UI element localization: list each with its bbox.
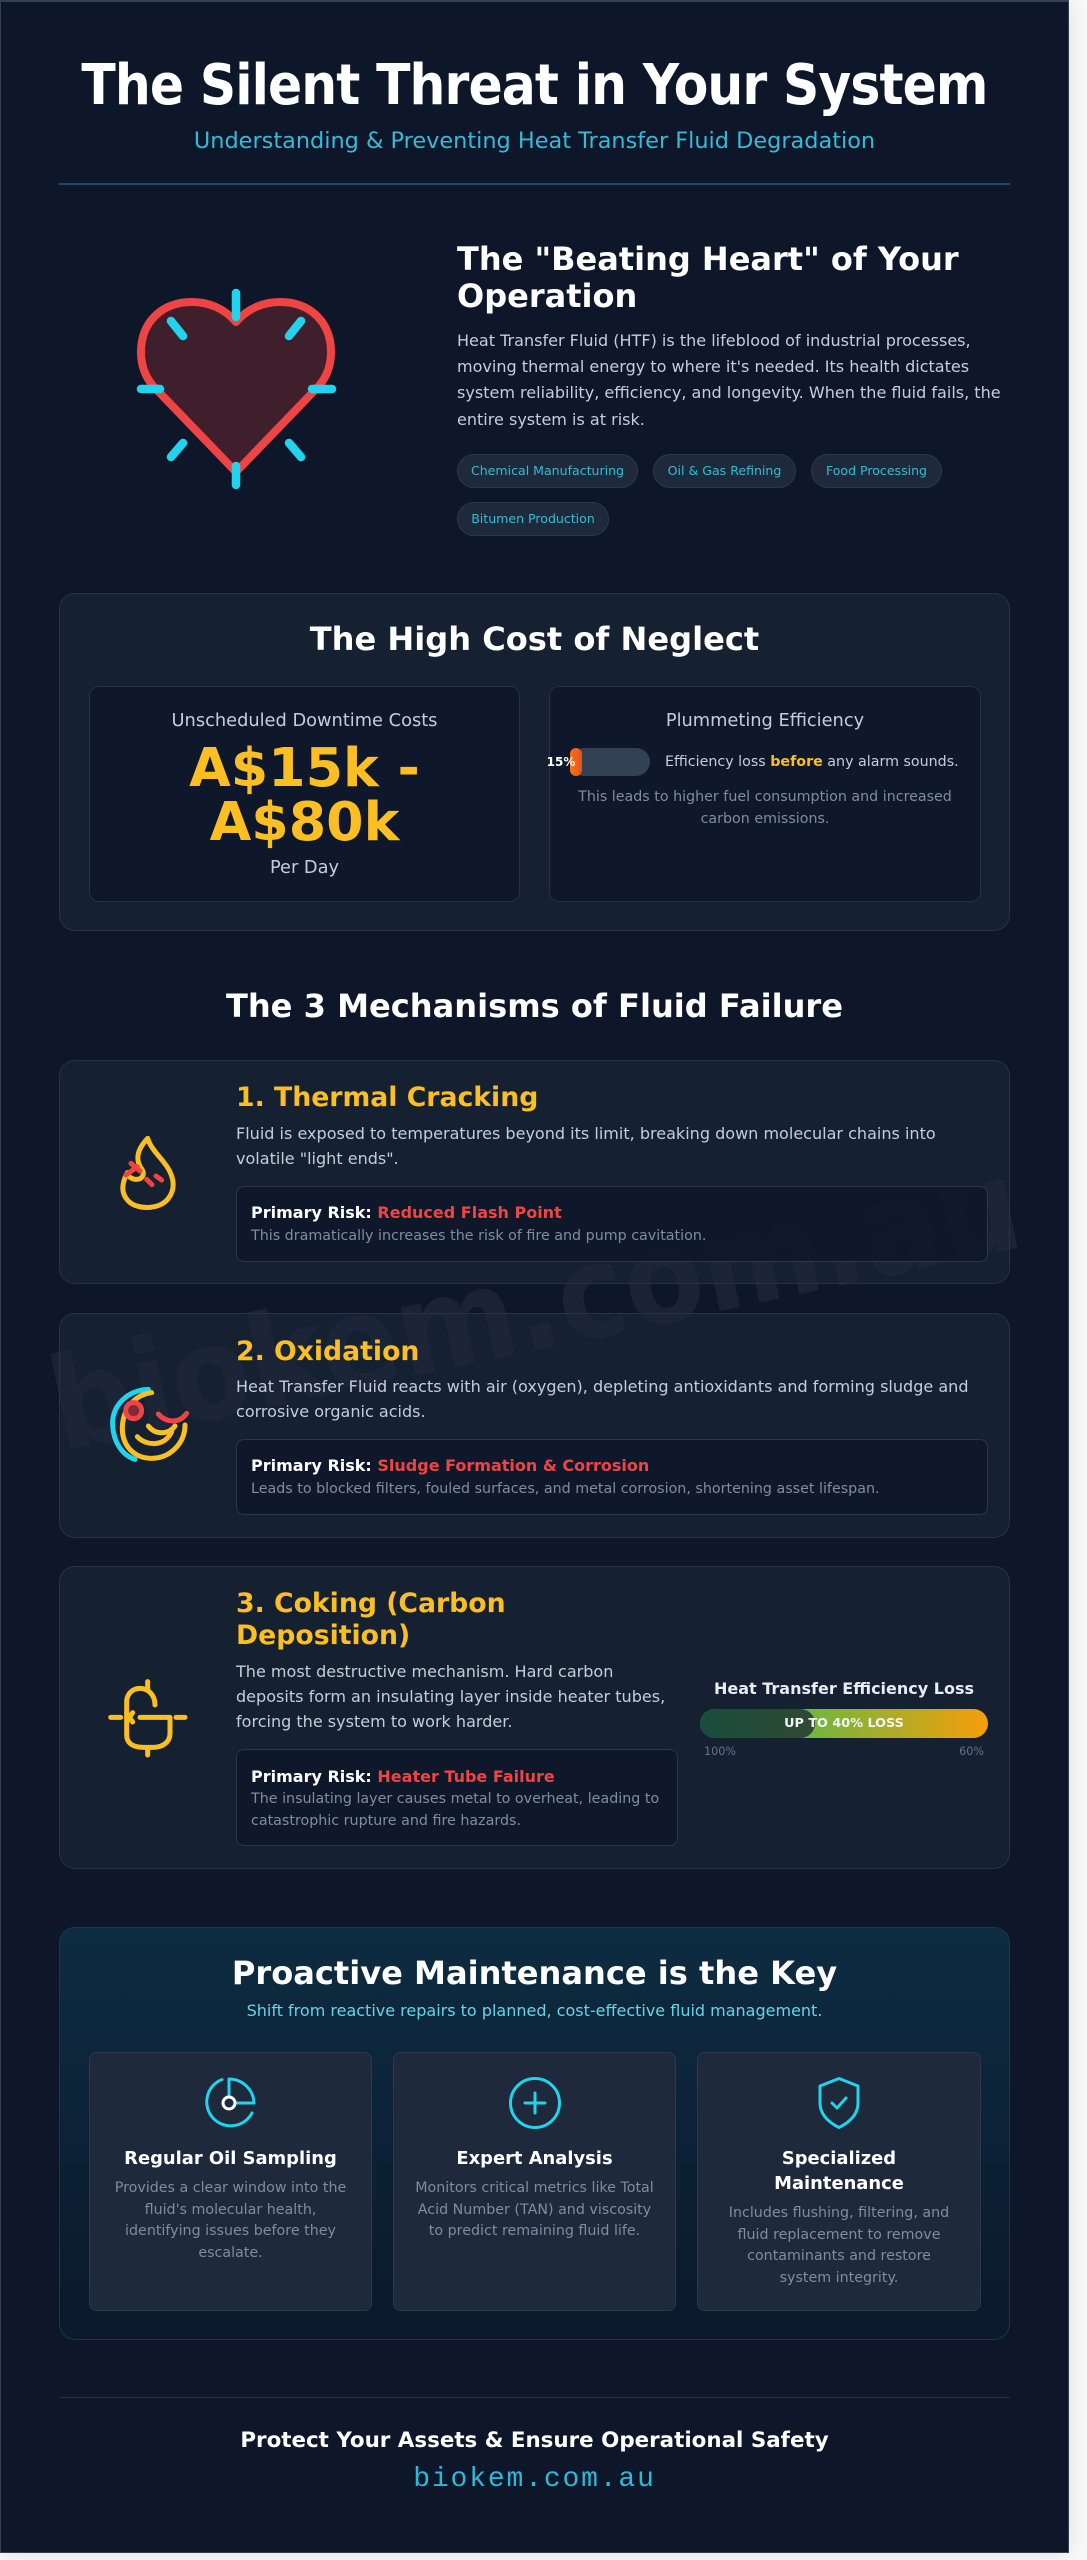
heading: 3. Coking (Carbon [236, 1588, 506, 1619]
efficiency note: Efficiency loss before any alarm sounds. [665, 754, 959, 770]
card text: Monitors critical metrics like Total [415, 2180, 654, 2196]
gradient bar [700, 1709, 988, 1738]
card text [415, 2180, 654, 2239]
panel: cost of neglect [59, 593, 1010, 931]
bar track [570, 748, 650, 776]
intro paragraph: system reliability, efficiency, and longevity. When the fluid fails, the [457, 383, 1001, 402]
intro heading: Operation [457, 277, 637, 315]
label: Plummeting Efficiency [666, 710, 864, 731]
footer website: biokem.com.au [413, 2464, 656, 2495]
consequence: This leads to higher fuel consumption and increased [578, 789, 952, 805]
icon: shield check [818, 2077, 860, 2129]
description: volatile "light ends". [236, 1149, 399, 1168]
section heading: The 3 Mechanisms of Fluid Failure [226, 987, 843, 1025]
consequence: carbon emissions. [701, 811, 829, 827]
per day: Per Day [270, 857, 339, 878]
card text: Includes flushing, filtering, and [729, 2205, 949, 2221]
heading: Deposition) [236, 1620, 410, 1651]
risk title: Primary Risk: Heater Tube Failure [251, 1767, 555, 1786]
tag: Chemical Manufacturing [471, 463, 624, 478]
tag: Food Processing [826, 463, 927, 478]
card title: Maintenance [774, 2173, 904, 2194]
card text: Provides a clear window into the [115, 2180, 346, 2196]
risk detail: catastrophic rupture and fire hazards. [251, 1813, 521, 1829]
footer divider [59, 2397, 1010, 2398]
subtitle: Understanding & Preventing Heat Transfer Fluid Degradation [194, 128, 875, 154]
cost figure: A$80k [210, 790, 399, 853]
card title: Regular Oil Sampling [124, 2148, 337, 2169]
primary risk [236, 1749, 678, 1846]
primary risk [236, 1439, 988, 1515]
cost figure [189, 736, 420, 853]
card: efficiency [549, 686, 981, 902]
description: deposits form an insulating layer inside heater tubes, [236, 1687, 665, 1706]
card title: Specialized [782, 2148, 896, 2169]
card text: contaminants and restore [747, 2248, 931, 2264]
lost portion [700, 1709, 815, 1738]
tag [811, 454, 942, 488]
risk detail: This dramatically increases the risk of fire and pump cavitation. [251, 1228, 706, 1244]
bar label: UP TO 40% LOSS [784, 1716, 904, 1731]
card text: to predict remaining fluid life. [429, 2223, 640, 2239]
bar fill [570, 748, 582, 776]
risk detail: Leads to blocked filters, fouled surfaces, and metal corrosion, shortening asset lifespan. [251, 1481, 880, 1497]
tag [653, 454, 796, 488]
bar: 15 percent efficiency loss [547, 748, 650, 776]
card text: system integrity. [780, 2270, 898, 2286]
intro paragraph: Heat Transfer Fluid (HTF) is the lifeblood of industrial processes, [457, 331, 971, 350]
description: Heat Transfer Fluid reacts with air (oxygen), depleting antioxidants and forming sludge and [236, 1377, 969, 1396]
cost figure: A$15k - [189, 736, 420, 799]
icon: beating heart [136, 288, 336, 490]
card: downtime costs [89, 686, 520, 902]
intro paragraph [457, 331, 1001, 429]
panel: coking [59, 1566, 1010, 1869]
card text: Acid Number (TAN) and viscosity [418, 2202, 651, 2218]
chart title: Heat Transfer Efficiency Loss [714, 1679, 974, 1698]
icon: oxidation [110, 1386, 190, 1462]
heading: 2. Oxidation [236, 1336, 419, 1367]
heading: The High Cost of Neglect [310, 620, 759, 658]
icon: flame [120, 1136, 176, 1210]
icon: plus in circle [509, 2077, 561, 2129]
card text [729, 2205, 949, 2286]
icon: pie gauge [205, 2078, 256, 2128]
card text: escalate. [198, 2244, 263, 2260]
description: The most destructive mechanism. Hard carbon [236, 1662, 613, 1681]
card text [115, 2180, 346, 2260]
consequence [578, 789, 952, 827]
panel: thermal cracking [59, 1060, 1010, 1284]
icon: coked pipe [108, 1679, 188, 1758]
description [236, 1124, 936, 1168]
card title [774, 2148, 904, 2194]
panel: proactive maintenance [59, 1927, 1010, 2340]
heading: Proactive Maintenance is the Key [232, 1954, 837, 1992]
chart: heat transfer efficiency loss [700, 1679, 988, 1758]
card: specialized maintenance [697, 2052, 981, 2311]
tag [457, 502, 609, 536]
header divider [59, 183, 1010, 185]
primary risk [236, 1186, 988, 1262]
intro paragraph: moving thermal energy to where it's needed. Its health dictates [457, 357, 969, 376]
axis end: 60% [959, 1745, 984, 1758]
intro paragraph: entire system is at risk. [457, 410, 645, 429]
risk detail: The insulating layer causes metal to overheat, leading to [251, 1791, 659, 1807]
subheading: Shift from reactive repairs to planned, cost-effective fluid management. [247, 2001, 822, 2020]
value: 15% [547, 755, 575, 769]
risk detail [250, 1791, 659, 1829]
description: forcing the system to work harder. [236, 1712, 512, 1731]
footer message: Protect Your Assets & Ensure Operational Safety [240, 2428, 829, 2453]
axis start: 100% [704, 1745, 736, 1758]
title: The Silent Threat in Your System [81, 53, 988, 118]
risk title: Primary Risk: Reduced Flash Point [251, 1203, 562, 1222]
heading [236, 1588, 506, 1651]
card: expert analysis [393, 2052, 676, 2311]
tag: Bitumen Production [471, 511, 595, 526]
card text: fluid replacement to remove [738, 2226, 940, 2242]
card: oil sampling [89, 2052, 372, 2311]
intro heading [457, 240, 959, 315]
industry tags [457, 454, 942, 536]
description: Fluid is exposed to temperatures beyond its limit, breaking down molecular chains into [236, 1124, 936, 1143]
panel: oxidation [59, 1313, 1010, 1538]
heading: 1. Thermal Cracking [236, 1082, 538, 1113]
card text: identifying issues before they [125, 2223, 336, 2239]
card text: fluid's molecular health, [145, 2202, 316, 2218]
risk title: Primary Risk: Sludge Formation & Corrosion [251, 1456, 649, 1475]
card title: Expert Analysis [456, 2148, 613, 2169]
description [236, 1377, 969, 1421]
tag [457, 454, 638, 488]
description [236, 1662, 665, 1731]
tag: Oil & Gas Refining [668, 463, 781, 478]
description: corrosive organic acids. [236, 1402, 426, 1421]
intro heading: The "Beating Heart" of Your [457, 240, 959, 278]
watermark: biokem.com.au [37, 1130, 1033, 1482]
label: Unscheduled Downtime Costs [172, 710, 437, 731]
